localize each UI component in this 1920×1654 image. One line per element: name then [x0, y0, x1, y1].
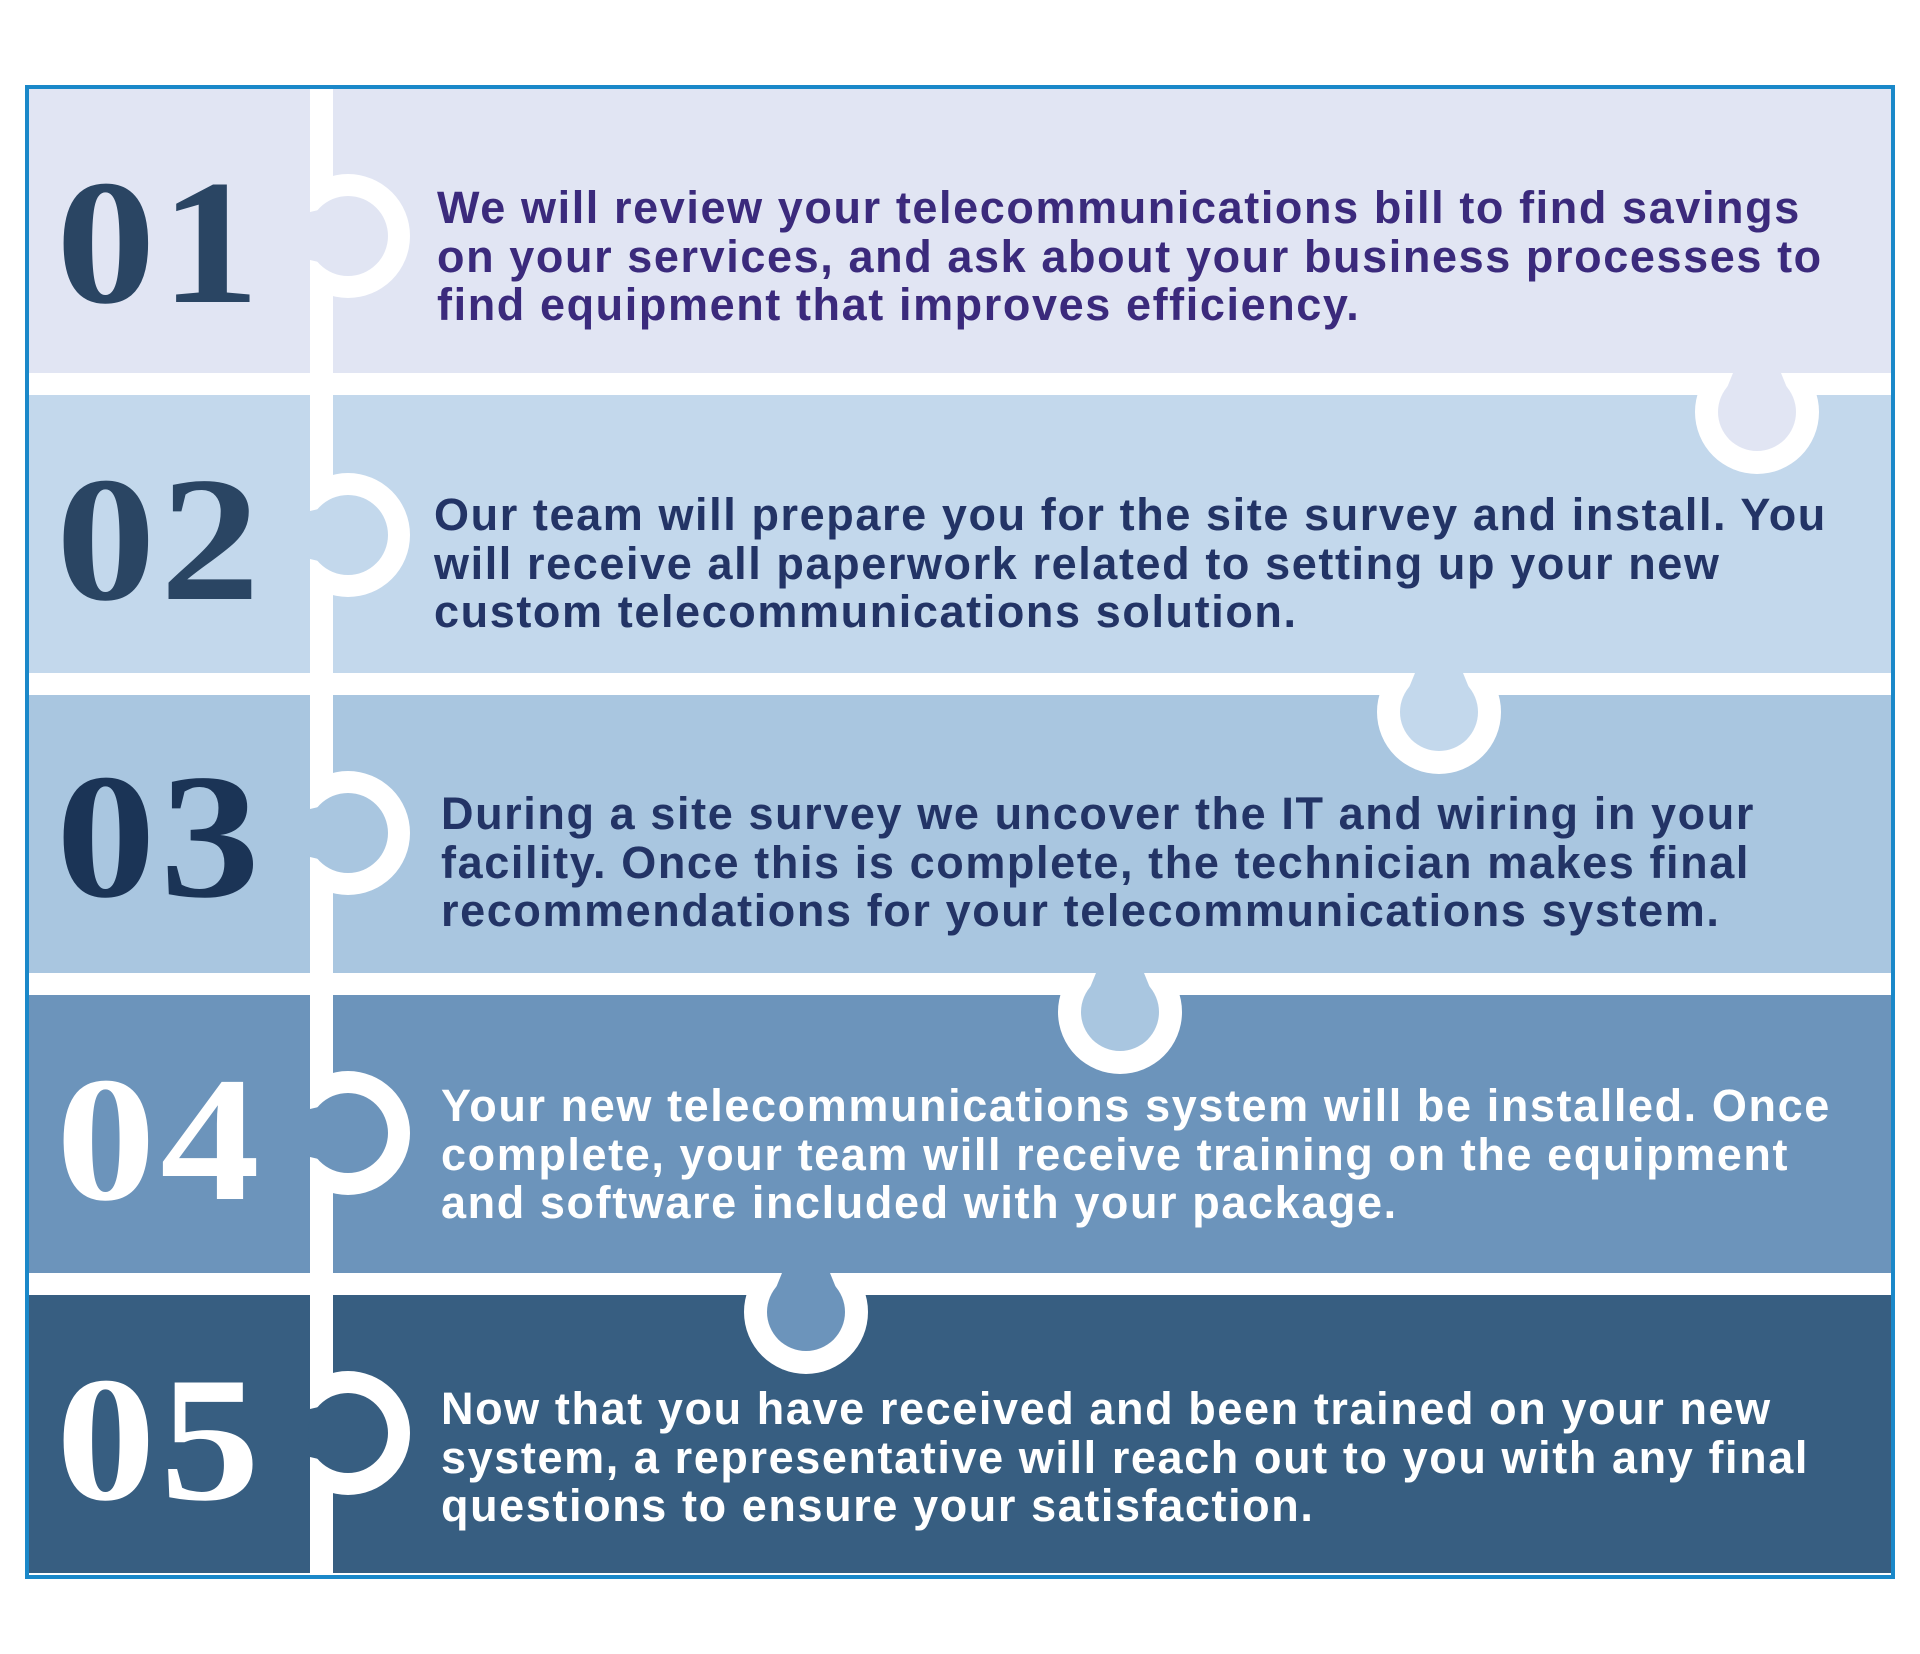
text 03: facility. Once this is complete, the technician makes final — [441, 836, 1750, 888]
text 05: system, a representative will reach out to you with any final — [441, 1432, 1809, 1482]
number 02: 02 — [56, 440, 264, 638]
text 04: and software included with your package. — [441, 1177, 1398, 1228]
text 05 — [441, 1383, 1809, 1531]
text 02 — [434, 489, 1827, 637]
text 02: will receive all paperwork related to setting up your new — [434, 538, 1721, 588]
number 03: 03 — [56, 737, 264, 935]
text 03: During a site survey we uncover the IT and wiring in your — [441, 788, 1755, 839]
vertical knobs — [310, 174, 410, 1495]
text 03 — [441, 788, 1755, 936]
text 02: custom telecommunications solution. — [434, 586, 1298, 637]
text 03: recommendations for your telecommunications system. — [441, 885, 1720, 936]
text 04: complete, your team will receive training on the equipment — [441, 1128, 1789, 1180]
text 01: We will review your telecommunications bill to find savings — [437, 182, 1801, 233]
number 05: 05 — [56, 1340, 264, 1538]
text 05: questions to ensure your satisfaction. — [441, 1480, 1314, 1531]
text 01: find equipment that improves efficiency. — [437, 279, 1360, 330]
text 04 — [441, 1080, 1831, 1228]
text 04: Your new telecommunications system will be installed. Once — [441, 1080, 1831, 1131]
number 01: 01 — [56, 143, 264, 341]
number 04: 04 — [56, 1040, 264, 1238]
text 02: Our team will prepare you for the site survey and install. You — [434, 489, 1827, 540]
text 05: Now that you have received and been trained on your new — [441, 1383, 1772, 1434]
text 01 — [437, 182, 1823, 330]
text 01: on your services, and ask about your business processes to — [437, 230, 1823, 282]
horizontal knobs — [744, 350, 1819, 1374]
